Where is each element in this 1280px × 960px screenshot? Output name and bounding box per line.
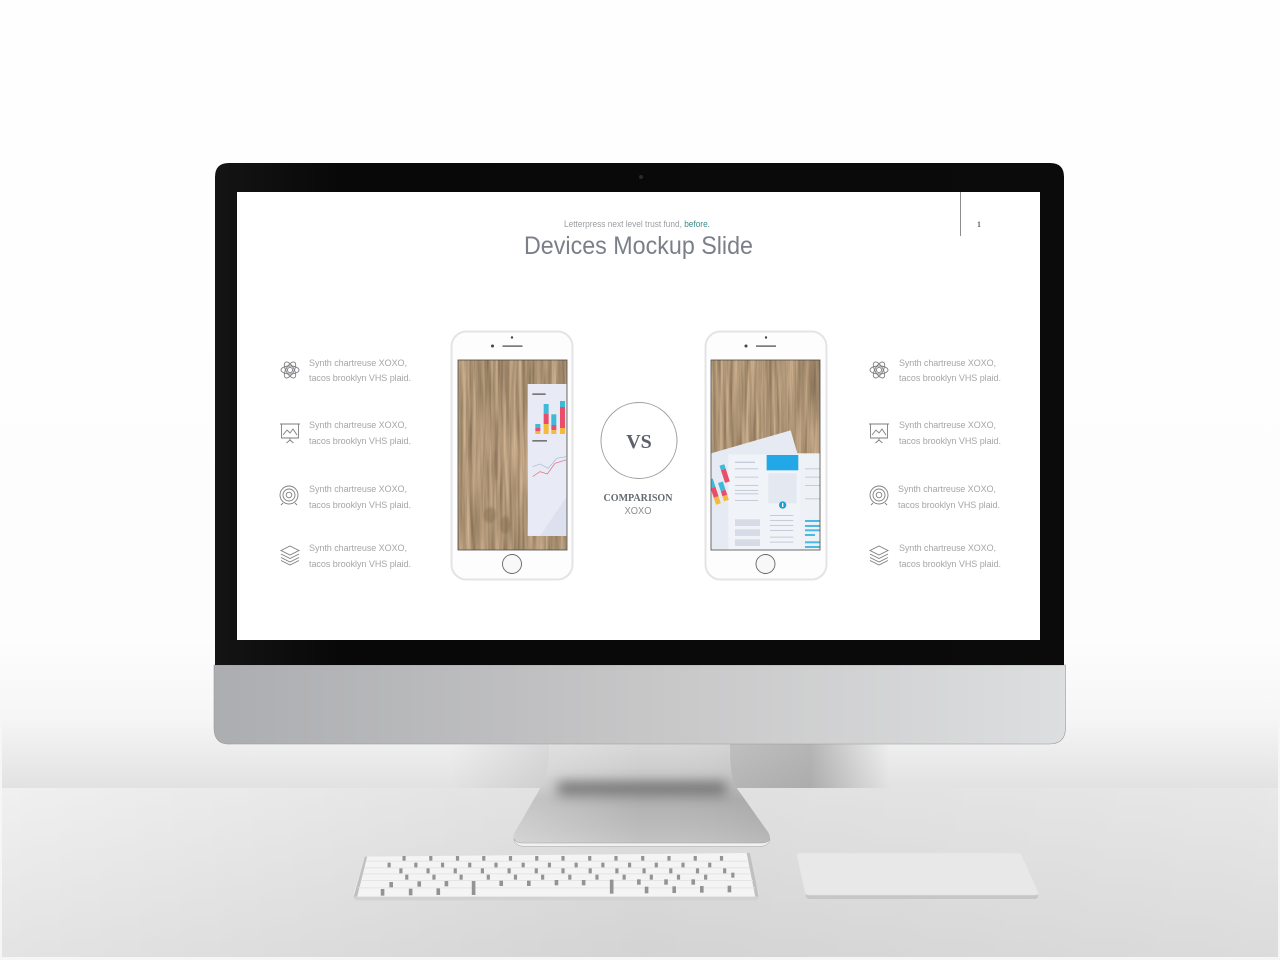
phone screen photo (705, 360, 821, 553)
text: item 3: Synth chartreuse XOXO, (309, 484, 407, 494)
left item 3 (280, 484, 411, 510)
right feature list (869, 358, 1001, 569)
screen (237, 192, 1040, 640)
text: item 2: tacos brooklyn VHS plaid. (309, 436, 411, 446)
page number tab: 1 (977, 220, 981, 229)
icon: target (280, 486, 298, 505)
text: item 1: Synth chartreuse XOXO, (309, 358, 407, 368)
keyboard row lines (358, 861, 755, 888)
text: item 4: Synth chartreuse XOXO, (309, 543, 407, 553)
trackpad (797, 853, 1038, 899)
phone right (705, 332, 826, 580)
icon: target (870, 486, 888, 505)
text: item 4: tacos brooklyn VHS plaid. (899, 559, 1001, 569)
left item 2 (280, 420, 411, 446)
speaker and camera (744, 336, 776, 348)
keyboard (354, 853, 759, 900)
monitor chin (214, 665, 1066, 744)
right item 2 (869, 420, 1001, 446)
phone body (452, 332, 572, 580)
home button (502, 554, 522, 574)
left item 1 (281, 358, 411, 383)
page number tab (960, 192, 981, 236)
text: item 2: Synth chartreuse XOXO, (899, 420, 996, 430)
text: item 2: tacos brooklyn VHS plaid. (899, 436, 1001, 446)
webcam (639, 175, 643, 179)
text: item 4: tacos brooklyn VHS plaid. (309, 559, 411, 569)
text: item 2: Synth chartreuse XOXO, (309, 420, 407, 430)
speaker and camera (491, 336, 522, 348)
monitor stand (513, 744, 770, 846)
phone body (706, 332, 826, 580)
icon: layers (870, 546, 888, 565)
text: item 3: Synth chartreuse XOXO, (898, 484, 996, 494)
comparison label: XOXO (624, 506, 652, 517)
left feature list (280, 358, 411, 569)
left item 4 (281, 543, 411, 569)
VS badge (601, 402, 677, 478)
icon: presentation board (280, 424, 300, 443)
right item 1 (870, 358, 1001, 383)
desk surface (0, 788, 1280, 960)
monitor shadow on wall (450, 744, 890, 788)
icon: presentation board (869, 424, 889, 443)
slide content (280, 192, 1001, 580)
text: item 1: Synth chartreuse XOXO, (899, 358, 996, 368)
monitor bezel (215, 163, 1064, 665)
monitor (214, 163, 1066, 744)
text: item 3: tacos brooklyn VHS plaid. (309, 500, 411, 510)
wood knots (484, 449, 510, 534)
keyboard key gaps (381, 856, 734, 896)
report paper with charts (528, 384, 567, 536)
text: item 1: tacos brooklyn VHS plaid. (899, 373, 1001, 383)
screen border (458, 360, 567, 550)
photo edge strips (0, 720, 1280, 960)
home button (756, 554, 775, 574)
phone left (452, 332, 572, 580)
icon: atom (870, 360, 888, 380)
text: item 1: tacos brooklyn VHS plaid. (309, 373, 411, 383)
text: item 4: Synth chartreuse XOXO, (899, 543, 996, 553)
slide subtitle: Letterpress next level trust fund, before. (564, 219, 710, 229)
report papers (705, 430, 821, 553)
right item 3 (870, 484, 1000, 510)
slide title: Devices Mockup Slide (524, 232, 753, 260)
right item 4 (870, 543, 1001, 569)
comparison label: COMPARISON (604, 493, 673, 504)
icon: layers (281, 546, 299, 565)
comparison label (604, 493, 673, 517)
screen border (711, 360, 820, 550)
VS badge: VS (626, 431, 652, 453)
text: item 3: tacos brooklyn VHS plaid. (898, 500, 1000, 510)
icon: atom (281, 360, 299, 380)
phone screen photo (458, 360, 567, 550)
